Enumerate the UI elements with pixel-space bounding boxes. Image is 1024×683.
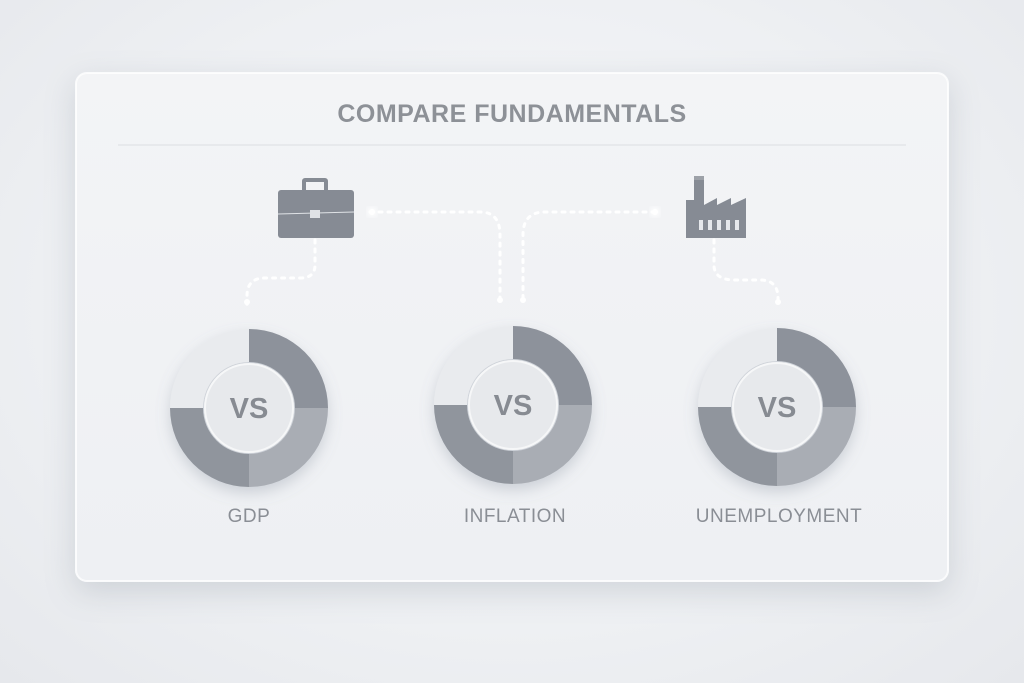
icon: factory <box>686 176 746 238</box>
donut: inflation <box>434 326 592 484</box>
connectors <box>247 212 778 305</box>
donut: GDP <box>170 329 328 487</box>
donut: inflation: VS <box>494 390 532 422</box>
label: inflation: INFLATION <box>464 506 566 527</box>
donut: GDP: VS <box>230 393 268 425</box>
donut: unemployment <box>698 328 856 486</box>
label: unemployment: UNEMPLOYMENT <box>696 506 862 527</box>
label: GDP: GDP <box>228 506 270 527</box>
icon: briefcase <box>278 178 354 238</box>
title: COMPARE FUNDAMENTALS <box>337 100 687 128</box>
panel: main card <box>75 72 949 582</box>
donut: unemployment: VS <box>758 392 796 424</box>
